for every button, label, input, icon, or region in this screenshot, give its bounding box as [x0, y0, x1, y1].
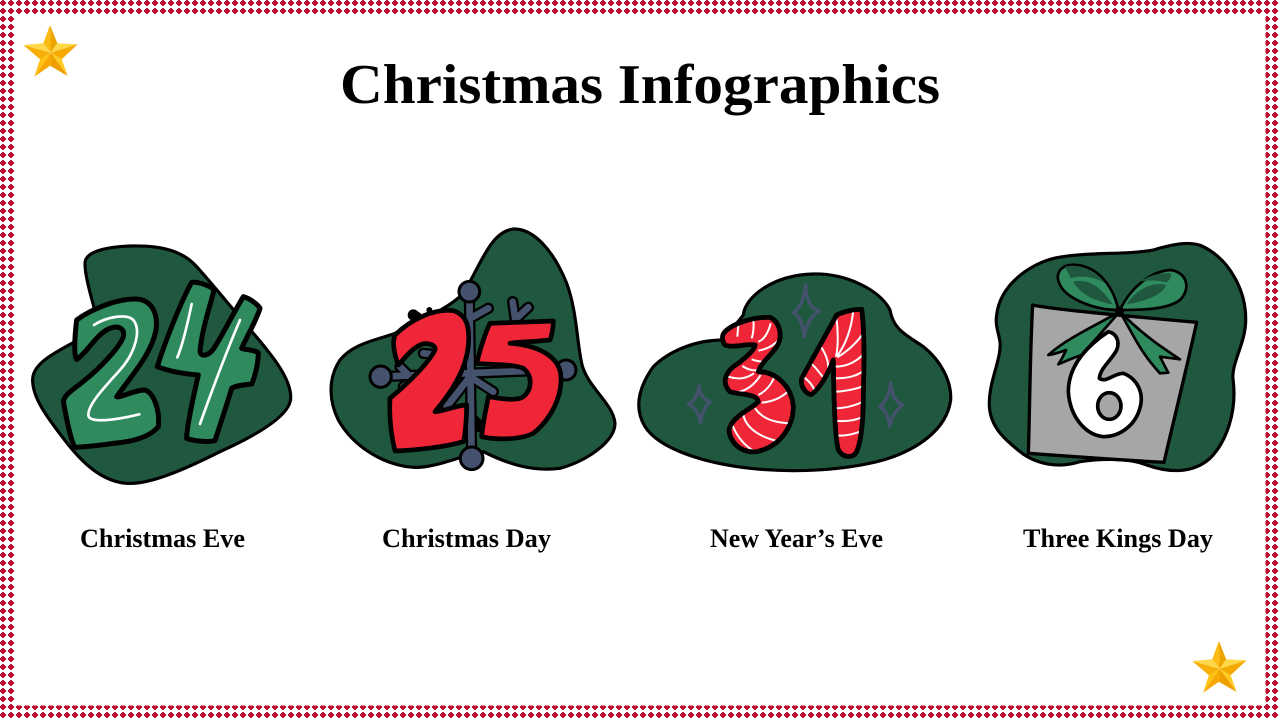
- label: Christmas Eve: Christmas Eve: [80, 524, 245, 553]
- label: New Year's Eve: New Year’s Eve: [710, 524, 883, 553]
- item: Three Kings Day gift icon: [989, 243, 1246, 471]
- item: Christmas Eve 24 icon: [33, 246, 291, 483]
- star: top left: [23, 25, 78, 77]
- item: New Year's Eve 31 icon: [639, 274, 951, 471]
- star: bottom right: [1192, 641, 1247, 693]
- item: Christmas Day 25 icon: [331, 229, 615, 470]
- title: Christmas Infographics: [340, 54, 940, 116]
- label: Christmas Day: Christmas Day: [382, 524, 551, 553]
- label: Three Kings Day: Three Kings Day: [1023, 524, 1213, 553]
